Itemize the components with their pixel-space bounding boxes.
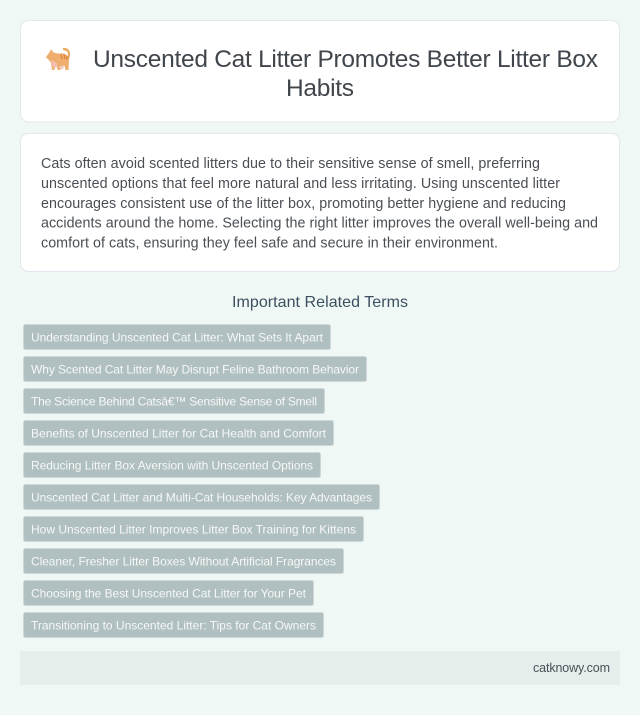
panel: related terms list xyxy=(24,324,380,638)
heading: important related terms: Important Related Terms xyxy=(232,294,408,311)
title: Unscented Cat Litter Promotes Better Litter Box xyxy=(93,46,598,73)
title: Habits xyxy=(286,75,354,102)
text block: description paragraph: accidents around the home. Selecting the right litter improves the overall well-being and xyxy=(41,216,598,232)
icon: orange cat xyxy=(46,48,70,70)
tag 4: Benefits of Unscented Litter for Cat Health and Comfort xyxy=(31,426,327,440)
tag 2: Why Scented Cat Litter May Disrupt Feline Bathroom Behavior xyxy=(31,362,359,376)
tag 10 xyxy=(24,612,324,638)
text block: description paragraph xyxy=(41,156,598,252)
panel: title card xyxy=(20,20,620,122)
tag 7: How Unscented Litter Improves Litter Box Training for Kittens xyxy=(31,522,356,536)
tag 1 xyxy=(24,324,330,350)
tag 8: Cleaner, Fresher Litter Boxes Without Artificial Fragrances xyxy=(31,554,336,568)
tag 6: Unscented Cat Litter and Multi-Cat Households: Key Advantages xyxy=(31,490,372,504)
tag 3 xyxy=(24,388,324,414)
text block: description paragraph: unscented options that feel more natural and less irritating. Using unscented litter xyxy=(41,176,560,192)
tag 5 xyxy=(24,452,320,478)
tag 9: Choosing the Best Unscented Cat Litter for Your Pet xyxy=(31,586,307,600)
text block: description paragraph: Cats often avoid scented litters due to their sensitive sense of smell, preferring xyxy=(41,156,540,172)
footer source text: catknowy.com xyxy=(533,661,610,675)
tag 6 xyxy=(24,484,380,510)
tag 3: The Science Behind Catsâ€™ Sensitive Sense of Smell xyxy=(31,394,317,408)
tag 8 xyxy=(24,548,344,574)
title xyxy=(93,46,598,102)
text block: description paragraph: encourages consistent use of the litter box, promoting better hygiene and reducing xyxy=(41,196,566,212)
tag 2 xyxy=(24,356,366,382)
text block: description paragraph: comfort of cats, ensuring they feel safe and secure in their environment. xyxy=(41,236,498,252)
tag 10: Transitioning to Unscented Litter: Tips for Cat Owners xyxy=(31,618,316,632)
tag 1: Understanding Unscented Cat Litter: What Sets It Apart xyxy=(31,330,324,344)
tag 4 xyxy=(24,420,334,446)
panel: description xyxy=(20,134,620,272)
tag 5: Reducing Litter Box Aversion with Unscented Options xyxy=(31,458,313,472)
tag 7 xyxy=(24,516,364,542)
footer xyxy=(20,651,620,685)
tag 9 xyxy=(24,580,314,606)
